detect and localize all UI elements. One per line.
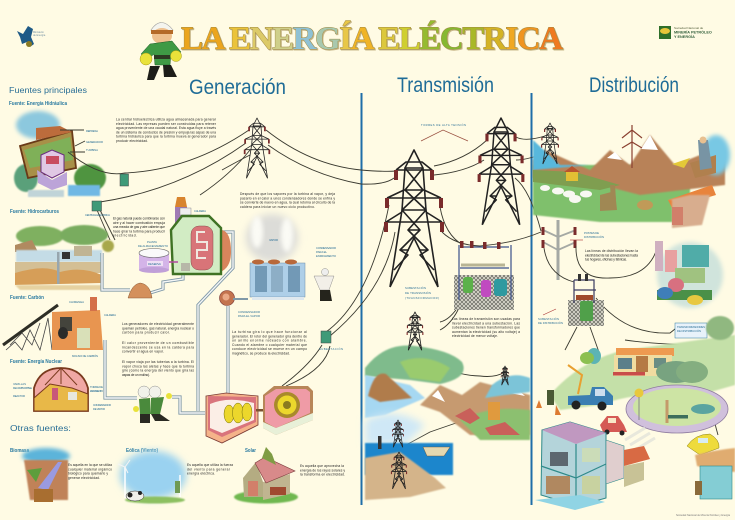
label: tank: PLANTA (147, 240, 157, 244)
text: central hidroeléctrica: de un sistema de conductos de presión y empuja las aspas de una (116, 130, 216, 134)
label: transformer callout: TRANSFORMADORES (677, 325, 705, 329)
illustration: cooling tower (246, 214, 305, 300)
illustration: transmission substation (454, 241, 514, 310)
label: Fuente Hidrocarburos: Fuente: Hidrocarburos (10, 209, 59, 215)
illustration: crosswalk (625, 428, 655, 450)
label: transformer callout: DE DISTRIBUCIÓN (677, 328, 701, 333)
illustration: hydroelectric dam: REPRESA (86, 129, 98, 133)
text: distribution lines: Las líneas de distribución llevan la (585, 249, 638, 253)
text: transmission lines: llevar electricidad a una subestación. Las (452, 321, 520, 325)
text: central hidroeléctrica: turbina hidráulica para que la turbina mueva al generador para (116, 135, 216, 139)
text: generators (122, 322, 194, 377)
text: transmission lines (452, 317, 520, 338)
label: subestación de transmisión: (TRANSFORMADOR) (405, 296, 439, 300)
illustration: fuel tank (139, 248, 178, 273)
text: transmission lines: Las líneas de transmisión son usadas para (452, 317, 520, 321)
text: wind: Es aquella que utiliza la fuerza (187, 463, 233, 467)
tower: shore (391, 452, 407, 489)
tower: generation (245, 118, 269, 178)
label: nuclear plant: DE VAPOR (93, 407, 105, 411)
logo: left institution: Ministerio (33, 31, 44, 34)
label: postes de distribución (570, 231, 604, 240)
illustration: cooling tower: VAPOR (269, 238, 278, 242)
label: tank (138, 240, 169, 248)
label: Fuente Carbón: Fuente: Carbón (10, 295, 44, 301)
text: transmission lines: aumentan la electricidad (su alto voltaje) a (452, 330, 520, 334)
logo: Sociedad Nacional de Minería Petróleo y Energía: MINERÍA PETRÓLEO (674, 29, 712, 34)
text: turbine generator (232, 330, 307, 356)
illustration: pump (220, 290, 248, 306)
label: condenser: PARA EL (316, 250, 327, 254)
illustration: apartment building (535, 422, 650, 510)
illustration: steam turbine (206, 393, 280, 443)
illustration: wind energy (118, 451, 186, 504)
character: engineer mascot (140, 22, 182, 80)
label: pump: PARA EL VAPOR (238, 314, 260, 318)
label: Fuente Energía Hidráulica: Fuente: Energía Hidráulica (9, 101, 67, 107)
heading: Fuentes principales: Fuentes principales (9, 86, 87, 95)
text: biomass: biológico para quemarlo y (68, 472, 108, 476)
text: generators: gire (como la energía del viento que gira las (122, 369, 194, 373)
illustration: yellow car (687, 434, 719, 455)
label: pole box: CENTRAL ELÉCTRICA (85, 212, 110, 217)
text: central hidroeléctrica: electricidad. Las represas pueden ser construidas para retener (116, 122, 217, 126)
label: pump: CONDENSADOR (238, 310, 260, 314)
text: distribution lines: tus hogares, oficinas y fábricas. (585, 258, 627, 262)
label: postes de distribución: DISTRIBUCIÓN (584, 234, 604, 239)
illustration: nuclear plant (34, 368, 88, 411)
text: generators: El calor proveniente de un combustible (122, 341, 194, 345)
tower: small transmission (407, 312, 423, 350)
logo: Sociedad Nacional de Minería Petróleo y Energía: Y ENERGÍA (674, 34, 695, 39)
label: Eólica: Eólica (Viento) (126, 448, 158, 454)
text: turbine generator: La turbina gira lo que hace funcionar al (232, 330, 307, 334)
text: central hidroeléctrica: agua proveniente de una caudal natural. Esta agua fluye a través (116, 126, 216, 130)
illustration: town (550, 316, 735, 433)
text: biomass: cualquier material orgánico (68, 467, 112, 471)
heading: Generación: Generación (189, 76, 286, 99)
label: transformer callout (675, 323, 707, 338)
label: nuclear plant: DE COMBUSTIBLE (13, 386, 32, 390)
text: biomass: Es aquella en la que se utiliza (68, 463, 112, 467)
text: vapor condensers (240, 192, 335, 209)
text: wind: del viento para generar (187, 467, 231, 471)
pole box: generator (321, 331, 331, 343)
pole box: top (120, 174, 128, 186)
tower: second transmission (479, 118, 523, 225)
illustration: fuel tank: RESERVA (148, 262, 161, 266)
pipes: main network (102, 232, 233, 413)
text: distribution lines: electricidad de las subestaciones hasta (585, 253, 638, 257)
title: LA ENERGÍA ELÉCTRICA (181, 20, 563, 57)
wires: generation lines (68, 130, 396, 386)
text: generators: El vapor viaja por las tuberías a la turbina. El (122, 360, 194, 364)
character: technician (314, 268, 334, 301)
label: Solar: Solar (245, 448, 256, 454)
label: tank: DE ALMACENAMIENTO (138, 244, 169, 248)
heading: Distribución: Distribución (589, 74, 679, 97)
illustration: distribution mountain landscape (533, 135, 730, 228)
illustration: hydroelectric dam: GENERADOR (86, 140, 103, 144)
tower: village (501, 366, 509, 385)
text: vapor condensers: Después de que los vapores por la turbina al vapor, y deja (240, 192, 335, 196)
illustration: small dome (128, 283, 152, 298)
label: nuclear plant: CONDENSADOR (93, 403, 111, 407)
text: central hidroeléctrica (116, 118, 217, 143)
text: turbine generator: un anillo enorme rodeado con alambre. (232, 339, 307, 343)
text: gas natural: El gas natural puede combinarse con (113, 216, 165, 220)
label: Torres de alta tensión (421, 122, 468, 141)
label: subestación de distribución: SUBESTACIÓN (538, 316, 559, 321)
label: subestación de transmisión: DE TRANSMISIÓN (405, 290, 431, 295)
text: generators: Los generadores de electricidad generalmente (122, 322, 194, 326)
text: wind: energía eléctrica. (187, 472, 215, 476)
text: vapor condensers: se convierte de nuevo en agua, la cual retorna al circuito de la (240, 201, 335, 205)
text: transmission lines: electricidad de menor voltaje. (452, 334, 498, 338)
heading: Transmisión: Transmisión (397, 74, 494, 97)
label: condenser (316, 246, 337, 258)
text: gas natural: aire y al hacer combustión empuja (113, 221, 165, 225)
wires: distribution (544, 245, 718, 435)
tower: large transmission (386, 150, 442, 287)
illustration: hydroelectric dam: TURBINA (86, 148, 98, 152)
label: coal plant: CALDERA (104, 313, 116, 317)
text: solar (300, 464, 345, 477)
illustration: utility truck (536, 365, 613, 415)
illustration: solar house (234, 447, 298, 504)
label: Biomasa: Biomasa (10, 448, 29, 454)
label: coal plant (69, 300, 116, 358)
illustration: hydroelectric dam (14, 111, 106, 197)
text: solar: la transforma en electricidad. (300, 473, 345, 477)
text: gas natural (113, 216, 166, 238)
logo: left institution: de Energía (33, 34, 46, 37)
logo: Sociedad Nacional de Minería Petróleo y Energía: Sociedad Nacional de (674, 26, 704, 30)
label: postes de distribución: POSTES DE (584, 231, 599, 235)
text: central hidroeléctrica: La central hidroeléctrica utiliza agua almacenada para generar (116, 118, 217, 122)
illustration: distribution substation (568, 274, 604, 326)
text: turbine generator: Cuando el alambre o cualquier material que (232, 343, 307, 347)
divider: generation / transmission (360, 93, 362, 505)
divider: transmission / distribution (530, 93, 532, 505)
label: nuclear plant: REACTOR (13, 394, 25, 398)
text: gas natural: hace girar la turbina para producir (113, 229, 166, 233)
label: Fuente Energía Nuclear: Fuente: Energía Nuclear (10, 359, 62, 365)
text: solar: Es aquella que aprovecha la (300, 464, 344, 468)
label: coal plant: CHIMENEA (69, 300, 84, 304)
text: biomass (68, 463, 112, 480)
text: turbine generator: conduce electricidad se mueve en un campo (232, 347, 307, 351)
text: distribution lines (585, 249, 638, 262)
label: subestación de transmisión: SUBESTACIÓN (405, 285, 426, 290)
characters: two workers (133, 386, 172, 423)
text: vapor condensers: pasarlo en el calor a unos condensadores donde se enfría y (240, 196, 335, 200)
text: wind (187, 463, 233, 476)
text: generators: queman petróleo, gas natural, energía nuclear o (122, 326, 194, 330)
logo: Sociedad Nacional de Minería Petróleo y Energía (659, 26, 712, 39)
text: gas natural: una mezcla de gas y aire caliente que (113, 225, 165, 229)
text: turbine generator: generador. El rotor del generador gira dentro de (232, 334, 307, 338)
text: gas natural: electricidad. (113, 234, 137, 238)
text: generators: aspas de un molino). (122, 373, 150, 377)
text: central hidroeléctrica: producir electricidad. (116, 139, 148, 143)
illustration: coal plant (3, 297, 103, 350)
text: transmission lines: subestaciones tienen transformadores que (452, 326, 520, 330)
illustration: hydrocarbons field (15, 225, 114, 290)
label: subestación de distribución: DE DISTRIBUCIÓN (538, 320, 563, 325)
label: nuclear plant (13, 382, 111, 411)
illustration: power plant boiler (171, 197, 231, 274)
text: generators: convertir el agua en vapor. (122, 350, 164, 354)
label: chimney: CALDERA (194, 209, 206, 213)
tower: coast (392, 420, 404, 447)
text: generators: vapor choca las aletas y hace que la turbina (122, 364, 194, 368)
text: solar: energía de los rayos solares y (300, 468, 345, 472)
label: subestación de distribución (538, 309, 563, 325)
illustration: red car (600, 416, 627, 436)
illustration: corner shop (695, 448, 735, 499)
label: nuclear plant: ENFRIAMIENTO (90, 389, 104, 393)
label: pump (238, 310, 260, 318)
text: biomass: generar electricidad. (68, 476, 100, 480)
heading: Otras fuentes: Otras fuentes: (10, 423, 71, 433)
label: coal plant: MOLINO DE CARBÓN (72, 353, 98, 358)
text: vapor condensers: caldera para iniciar un nuevo ciclo productivo. (240, 205, 315, 209)
label: nuclear plant: TORRE DE (90, 385, 103, 389)
credit: Sociedad Nacional de Minería Petróleo y Energía (676, 514, 731, 517)
label: condenser: CONDENSADOR (316, 246, 336, 250)
illustration: distribution pole (543, 220, 576, 280)
label: Torres de alta tensión: TORRES DE ALTA TENSIÓN (421, 122, 466, 127)
pole box: hydrocarbon line (92, 201, 102, 211)
tower: distribution mountain (542, 123, 558, 164)
logo: left institution (17, 26, 46, 47)
label: nuclear plant: VARILLAS (13, 382, 26, 386)
illustration: biomass (22, 448, 70, 502)
tower: mountain pylon (622, 125, 642, 168)
label: condenser: ENFRIAMIENTO (316, 254, 337, 258)
label: subestación de transmisión (405, 285, 439, 300)
illustration: transmission landscape (365, 345, 530, 500)
text: generators: incandescente se usa en la caldera para (122, 345, 194, 349)
wires: transmission (406, 136, 545, 445)
label: pole box generator: SUBESTACIÓN (319, 346, 343, 351)
illustration: generator (263, 386, 313, 435)
illustration: factory (655, 241, 723, 308)
text: generators: carbón para producir calor. (122, 331, 170, 335)
text: turbine generator: magnético, se produce la electricidad. (232, 352, 290, 356)
